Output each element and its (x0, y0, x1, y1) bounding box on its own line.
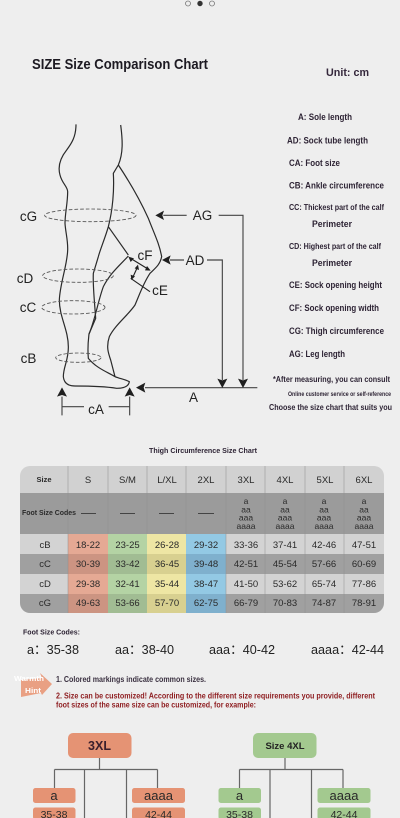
foot size codes row: aaaa (237, 521, 256, 531)
data rows: 49-63 (76, 598, 100, 609)
diagram labels (17, 208, 212, 417)
foot size codes row: aa (241, 504, 251, 514)
data rows: 74-87 (312, 598, 336, 609)
4XL customization tree: aaaa (330, 788, 359, 803)
foot size codes row: a (322, 496, 327, 506)
foot size codes: aaa：40-42 (209, 642, 275, 657)
hint notes (56, 675, 375, 710)
foot size codes row: aaa (357, 512, 371, 522)
measurement legend: CG: Thigh circumference (289, 326, 384, 336)
leg outline (59, 124, 162, 388)
data rows: 65-74 (312, 579, 336, 590)
4XL customization tree: a (236, 788, 244, 803)
measurement legend: CD: Highest part of the calf (289, 242, 381, 251)
measurement legend: A: Sole length (298, 112, 352, 122)
foot size codes row: aa (359, 504, 369, 514)
3XL customization tree (33, 733, 185, 818)
size chart table (20, 466, 384, 613)
foot size codes row: aaaa (355, 521, 374, 531)
data rows: 47-51 (352, 540, 376, 551)
header row: 6XL (356, 475, 372, 486)
data rows: 77-86 (352, 579, 376, 590)
header row: 5XL (317, 475, 333, 486)
diagram labels: cE (152, 283, 168, 298)
diagram labels: cD (17, 271, 34, 286)
data rows: 35-44 (155, 579, 179, 590)
3XL customization tree: a (50, 788, 58, 803)
carousel dots (186, 1, 214, 6)
diagram labels: AD (186, 253, 205, 268)
header row (36, 475, 372, 486)
data rows: 45-54 (273, 559, 297, 570)
data rows: 32-41 (115, 579, 140, 590)
diagram labels: A (189, 390, 198, 405)
title: SIZE Size Comparison Chart (32, 56, 208, 73)
diagram labels: cF (138, 248, 152, 263)
data rows: 33-42 (115, 559, 140, 570)
data rows: 26-28 (155, 540, 179, 551)
data rows: 29-38 (76, 579, 100, 590)
header row: Size (36, 475, 52, 484)
data rows: 62-75 (194, 598, 218, 609)
dashed measurement rings (42, 209, 136, 362)
foot size codes row: aaa (278, 512, 292, 522)
foot size codes row: a (362, 496, 367, 506)
measurement legend: CF: Sock opening width (289, 303, 379, 313)
foot size codes (23, 628, 384, 657)
hint notes: 1. Colored markings indicate common sizes. (56, 675, 206, 684)
data rows: cG (39, 598, 51, 609)
header row: L/XL (157, 475, 177, 486)
foot size codes row: aaa (239, 512, 253, 522)
data rows: 41-50 (234, 579, 258, 590)
foot size codes: aa：38-40 (115, 642, 174, 657)
data rows: 42-46 (312, 540, 336, 551)
data rows: 38-47 (194, 579, 218, 590)
foot size codes row: a (244, 496, 249, 506)
data rows: 53-62 (273, 579, 297, 590)
data rows (39, 540, 376, 609)
measurement legend: CB: Ankle circumference (289, 180, 384, 190)
foot size codes: Foot Size Codes: (23, 628, 80, 636)
foot size codes row: Foot Size Codes (22, 508, 76, 517)
measurement legend: AG: Leg length (289, 349, 345, 359)
diagram labels: cB (21, 351, 36, 366)
data rows: 57-66 (312, 559, 336, 570)
measurement legend (269, 112, 392, 412)
leg measurement diagram (42, 124, 257, 415)
foot size codes: a：35-38 (27, 642, 79, 657)
header row: 4XL (277, 475, 293, 486)
foot size codes row: aaa (317, 512, 331, 522)
data rows: 36-45 (155, 559, 179, 570)
header row: 2XL (198, 475, 214, 486)
foot size codes row: aaaa (315, 521, 334, 531)
table heading: Thigh Circumference Size Chart (149, 446, 257, 455)
data rows: 57-70 (155, 598, 179, 609)
data rows: 53-66 (115, 598, 140, 609)
warm hint icon: Hint (25, 686, 42, 695)
hint notes: foot sizes of the same size can be customized, for example: (56, 700, 256, 710)
measurement legend: Perimeter (312, 258, 352, 268)
data rows: cC (39, 559, 51, 570)
data rows: 78-91 (352, 598, 376, 609)
foot size codes row: aa (280, 504, 290, 514)
unit label: Unit: cm (326, 67, 369, 79)
header row: 3XL (238, 475, 254, 486)
3XL customization tree: aaaa (144, 788, 174, 803)
measurement legend: CC: Thickest part of the calf (289, 203, 384, 212)
data rows: 70-83 (273, 598, 297, 609)
data rows: 29-32 (194, 540, 218, 551)
data rows: 33-36 (234, 540, 258, 551)
diagram labels: cG (20, 209, 37, 224)
diagram labels: cC (20, 300, 36, 315)
measurement legend: Perimeter (312, 219, 352, 229)
foot size codes row: a (283, 496, 288, 506)
data rows: 39-48 (194, 559, 218, 570)
measurement legend: CE: Sock opening height (289, 280, 382, 290)
data rows: 42-51 (234, 559, 258, 570)
dimension arrows (62, 215, 257, 415)
4XL customization tree: Size 4XL (265, 741, 305, 752)
data rows: 37-41 (273, 540, 297, 551)
foot size codes row: aaaa (276, 521, 295, 531)
data rows: 18-22 (76, 540, 100, 551)
4XL customization tree (218, 733, 370, 818)
data rows: 30-39 (76, 559, 100, 570)
measurement legend: CA: Foot size (289, 158, 340, 168)
diagram labels: cA (88, 402, 104, 417)
data rows: 66-79 (234, 598, 258, 609)
foot size codes: aaaa：42-44 (311, 642, 384, 657)
3XL customization tree: 3XL (88, 739, 111, 753)
measurement legend: AD: Sock tube length (287, 136, 368, 146)
header row: S (85, 475, 91, 486)
data rows: cB (39, 540, 51, 551)
data rows: cD (39, 579, 51, 590)
diagram labels: AG (193, 208, 212, 223)
foot size codes row: aa (319, 504, 329, 514)
warm hint icon: Warmth (14, 674, 44, 683)
data rows: 23-25 (115, 540, 140, 551)
header row: S/M (119, 475, 136, 486)
data rows: 60-69 (352, 559, 376, 570)
warm hint icon (14, 673, 52, 697)
foot size codes row (22, 496, 374, 531)
